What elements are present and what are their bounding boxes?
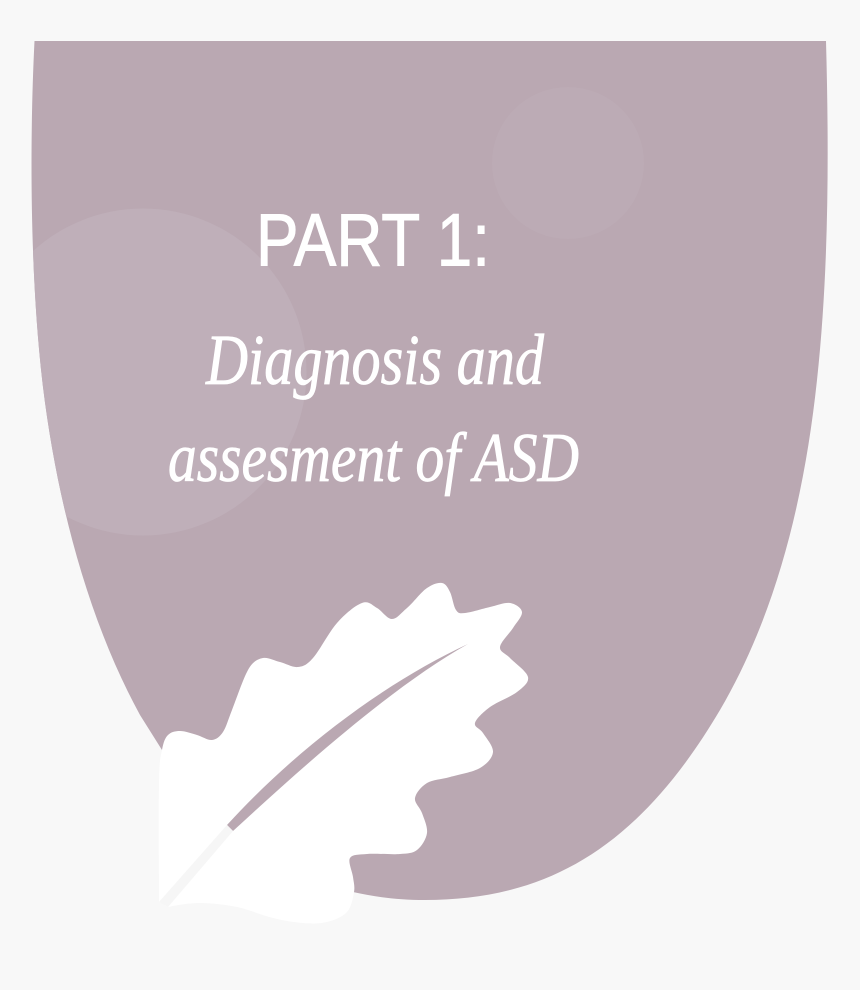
subtitle: Diagnosis and [205, 320, 545, 400]
subtitle: assesment of ASD [168, 420, 579, 497]
leaf stem [159, 825, 233, 907]
heading: part 1: PART 1: [256, 198, 490, 282]
decorative circles [33, 254, 66, 516]
subtitle [168, 320, 579, 497]
leaf vein [227, 644, 468, 831]
icon: white leaf [159, 583, 528, 923]
